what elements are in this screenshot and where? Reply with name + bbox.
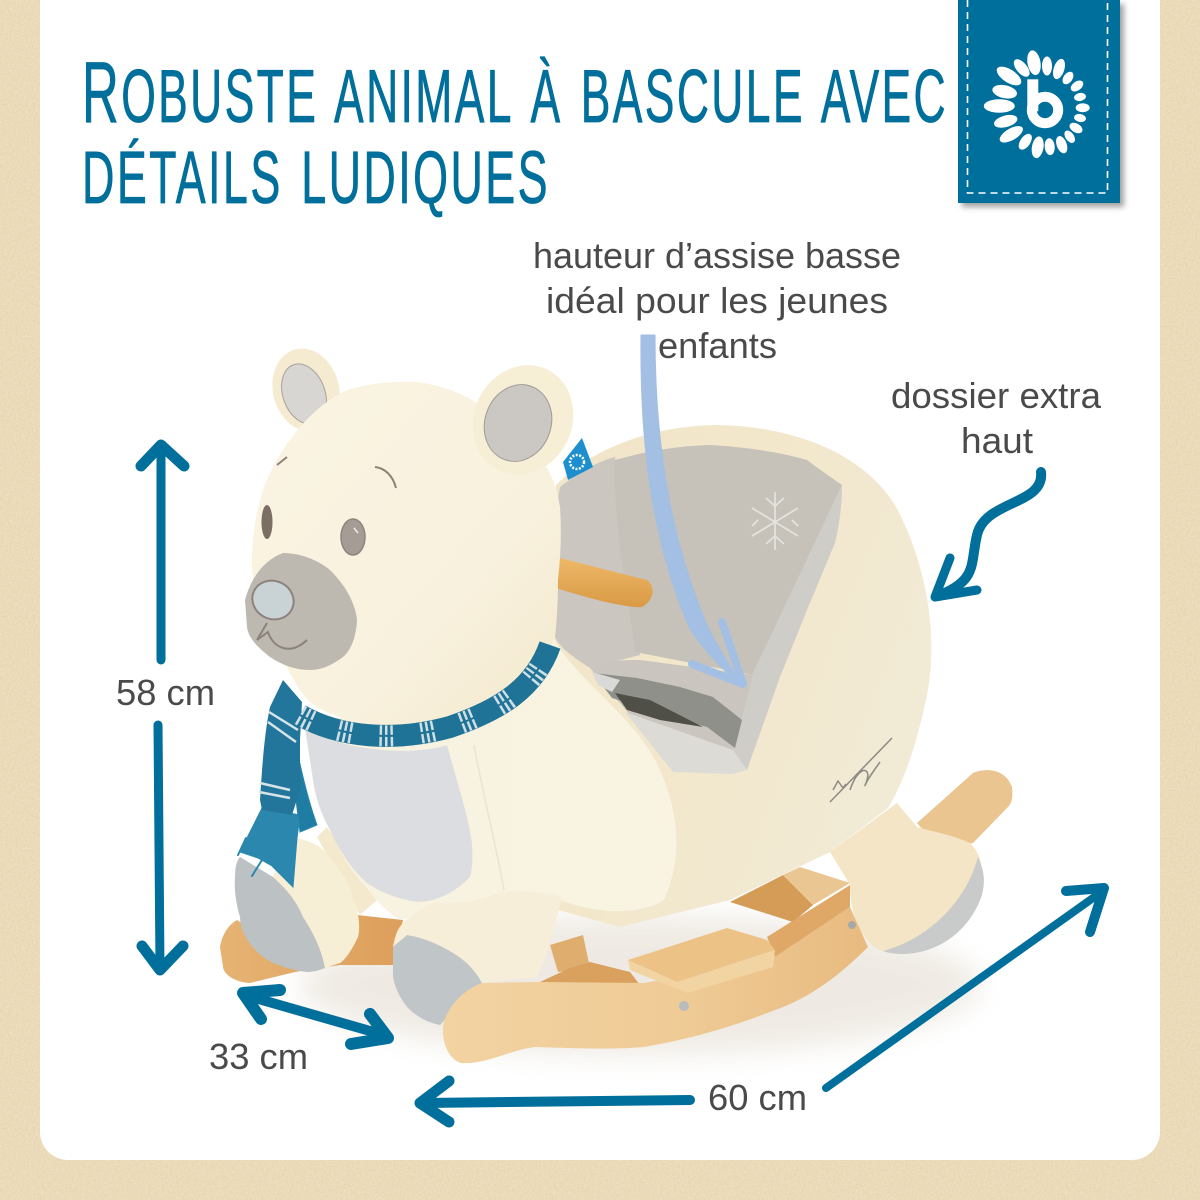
scarf neck band xyxy=(300,645,550,736)
nose xyxy=(246,574,300,626)
scarf hanging end xyxy=(260,680,302,815)
rear-left foot xyxy=(235,827,377,972)
dimension: 33 cm label: 33 cm xyxy=(209,1036,308,1077)
screw xyxy=(679,1001,689,1011)
arrow: backrest xyxy=(935,472,1041,597)
scarf band stripes xyxy=(300,645,550,736)
seat front xyxy=(625,712,747,774)
scarf stripes xyxy=(259,712,298,798)
right eye xyxy=(341,519,365,555)
scarf fringe xyxy=(238,745,317,887)
callout: low seat height xyxy=(533,235,901,366)
far rocker front end xyxy=(220,915,403,983)
callout: extra high backrest: haut xyxy=(961,420,1033,461)
backrest rim xyxy=(732,485,842,770)
callout: extra high backrest: dossier extra xyxy=(891,375,1102,416)
handle xyxy=(556,557,652,607)
brand tag with logo xyxy=(958,0,1124,207)
brows xyxy=(277,457,396,488)
rocking bear product photo xyxy=(220,341,1012,1063)
crossbar xyxy=(730,867,850,922)
title: DÉTAILS LUDIQUES xyxy=(82,136,550,219)
seat cushion xyxy=(590,660,753,752)
seam stitching xyxy=(474,745,504,890)
screw right xyxy=(848,921,856,929)
snowflake embroidery xyxy=(752,492,798,550)
arrow: width right xyxy=(826,888,1104,1088)
callout: low seat height: idéal pour les jeunes xyxy=(546,280,888,321)
soft floor shadow xyxy=(300,915,980,1055)
back foot xyxy=(830,803,984,954)
arrow: height down xyxy=(142,725,183,970)
seat left wing xyxy=(553,457,640,668)
rocker top face xyxy=(540,962,640,985)
left eye xyxy=(262,505,272,539)
title xyxy=(82,45,948,219)
centre post xyxy=(550,935,590,972)
dimension: 60 cm label: 60 cm xyxy=(708,1077,807,1118)
front rocker xyxy=(443,907,868,1063)
logo: sunburst b xyxy=(984,49,1090,159)
left ear xyxy=(263,341,349,439)
front foot xyxy=(393,891,562,1025)
signature xyxy=(830,738,892,802)
scarf band weave xyxy=(300,645,550,736)
blue tag xyxy=(563,438,593,480)
callout: low seat height: enfants xyxy=(658,325,777,366)
muzzle xyxy=(245,553,357,670)
callout: low seat height: hauteur d’assise basse xyxy=(533,235,901,276)
mouth xyxy=(257,623,307,649)
arrow: height up xyxy=(141,445,184,660)
chest patch xyxy=(305,728,472,902)
safety belt xyxy=(592,672,742,748)
arrow: depth xyxy=(243,990,388,1044)
arrow: seat height (light blue) xyxy=(641,335,743,685)
seat shell xyxy=(540,425,931,927)
backrest cushion xyxy=(615,445,842,675)
callout: extra high backrest xyxy=(891,375,1102,461)
body front xyxy=(305,637,676,920)
right ear xyxy=(455,349,591,491)
foot rest xyxy=(628,928,775,993)
dimension: 58 cm label: 58 cm xyxy=(116,672,215,713)
head xyxy=(252,382,561,725)
far rocker rear end xyxy=(917,770,1012,850)
arrow: width left xyxy=(420,1081,690,1122)
rocker top face right xyxy=(767,885,850,957)
